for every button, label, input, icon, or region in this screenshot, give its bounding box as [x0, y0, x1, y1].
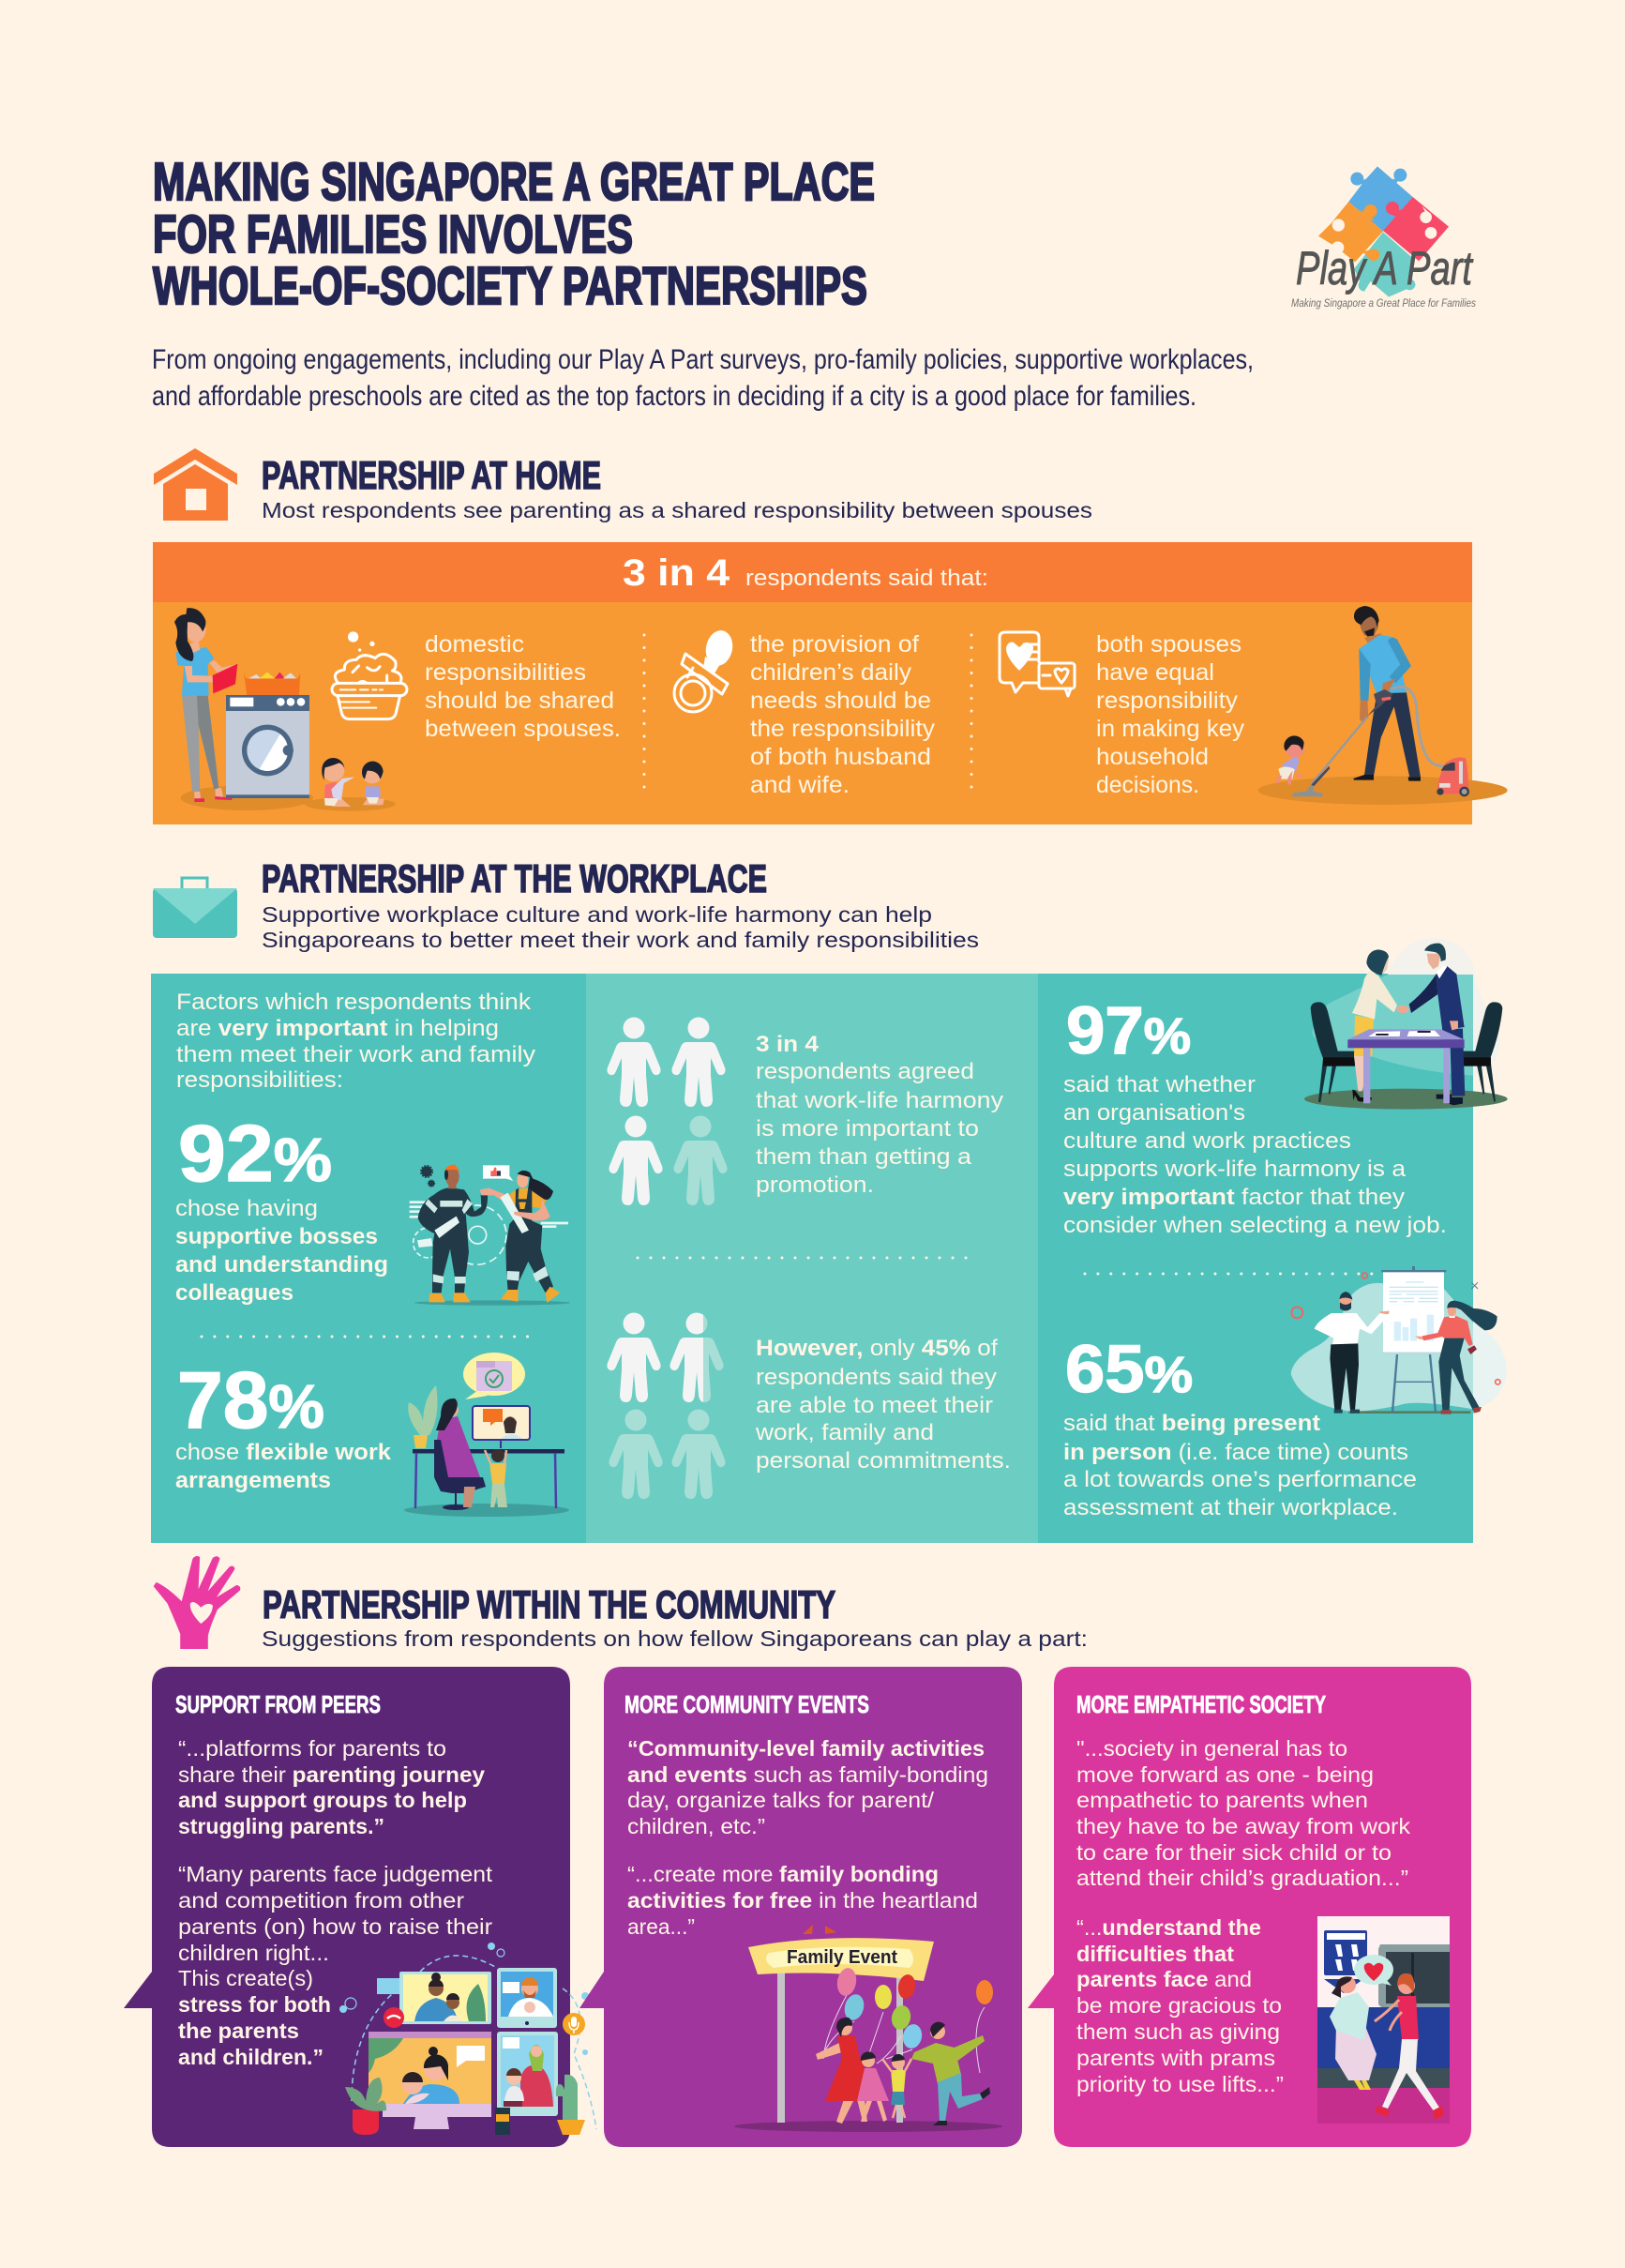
- quote: family bonding for free: [627, 1862, 978, 1939]
- text: domestic responsibilities: responsibilities: [425, 659, 586, 686]
- quote: understand the difficulties: parents face and: [1076, 1967, 1252, 1991]
- icon: briefcase: [153, 878, 237, 938]
- text: household decisions: household: [1096, 744, 1209, 770]
- quote: judgement and competition: and competition from other: [178, 1888, 464, 1913]
- text: face time: a lot towards one’s performance: [1063, 1467, 1417, 1492]
- text: factors intro: them meet their work and family: [176, 1042, 536, 1067]
- text: only 45%: respondents said they: [756, 1365, 998, 1390]
- logo wordmark: Play A Part: [1296, 242, 1474, 295]
- intro text: From ongoing engagements, including our Play A Part surveys, pro-family policies, supportive workplaces,: [152, 344, 1254, 375]
- quote: empathetic to parents: [1076, 1736, 1410, 1890]
- quote: parenting journey: “...platforms for parents to: [178, 1736, 446, 1761]
- quote: empathetic to parents: "...society in general has to: [1076, 1736, 1347, 1761]
- text: children's daily needs: children’s daily: [750, 659, 912, 686]
- icon: puzzle pieces: [1318, 166, 1449, 297]
- heading: partnership within the community: Suggestions from respondents on how fellow Singaporeans can play a part:: [262, 1626, 1088, 1651]
- quote: judgement and competition: children right...: [178, 1941, 329, 1965]
- text: organisation culture: consider when selecting a new job.: [1063, 1213, 1447, 1238]
- text: supportive bosses: chose having: [175, 1196, 318, 1221]
- text: domestic responsibilities: domestic: [425, 631, 524, 658]
- illustration: parent working from home: [404, 1353, 569, 1517]
- illustration: mother at washing machine with children: [174, 608, 396, 811]
- text: only 45%: However, only 45% of: [756, 1336, 998, 1361]
- text: children's daily needs: the responsibility: [750, 716, 936, 742]
- panel: workplace right column: [1038, 938, 1508, 1543]
- heading: partnership at the workplace: [262, 856, 979, 952]
- quote: understand the difficulties: parents with prams: [1076, 2046, 1275, 2070]
- text: household decisions: in making key: [1096, 716, 1245, 742]
- quote: empathetic to parents: move forward as one - being: [1076, 1762, 1374, 1787]
- banner: 3 in 4 respondents: [153, 542, 1472, 602]
- text: household decisions: decisions.: [1096, 772, 1199, 798]
- title: WHOLE-OF-SOCIETY PARTNERSHIPS: [153, 256, 867, 316]
- text: household decisions: both spouses: [1096, 631, 1241, 658]
- text: only 45%: [755, 1336, 1011, 1474]
- intro text: and affordable preschools are cited as the top factors in deciding if a city is a good place for families.: [152, 381, 1196, 412]
- card heading: MORE EMPATHETIC SOCIETY: [1076, 1690, 1326, 1718]
- heading: partnership at home: Most respondents see parenting as a shared responsibility between spouses: [262, 498, 1092, 522]
- quote: empathetic to parents: attend their child’s graduation...”: [1076, 1866, 1408, 1890]
- text: household decisions: responsibility: [1096, 688, 1239, 714]
- heading: partnership at home: [262, 453, 1092, 522]
- quote: empathetic to parents: empathetic to parents when: [1076, 1788, 1368, 1812]
- panel: workplace middle column: [586, 974, 1038, 1543]
- panel: workplace left column: [151, 974, 586, 1543]
- text: face time: in person (i.e. face time) counts: [1063, 1440, 1408, 1465]
- quote: parenting journey: [178, 1736, 485, 1838]
- heading: partnership at the workplace: Singaporeans to better meet their work and family responsibilities: [262, 928, 979, 952]
- quote: community-level activities: [627, 1736, 988, 1838]
- card heading: MORE COMMUNITY EVENTS: [624, 1690, 869, 1718]
- card heading: SUPPORT FROM PEERS: [175, 1690, 381, 1718]
- text: 3 in 4 work-life harmony: that work-life harmony: [756, 1088, 1004, 1113]
- text: children's daily needs: [750, 631, 936, 798]
- panel: home: [153, 542, 1508, 824]
- banner: 3 in 4 respondents: 3 in 4: [623, 552, 730, 594]
- quote: understand the difficulties: them such as giving: [1076, 2019, 1280, 2044]
- text: organisation culture: supports work-life harmony is a: [1063, 1157, 1406, 1182]
- quote: judgement and competition: stress for both: [178, 1992, 331, 2017]
- quote: empathetic to parents: to care for their sick child or to: [1076, 1840, 1392, 1865]
- stat: 65%: 65%: [1065, 1333, 1193, 1407]
- title: [153, 152, 875, 316]
- text: flexible work: [175, 1440, 391, 1493]
- text: factors intro: responsibilities:: [176, 1067, 343, 1093]
- stat: 78%: 78%: [177, 1356, 324, 1445]
- text: domestic responsibilities: should be shared: [425, 688, 614, 714]
- quote: judgement and competition: the parents: [178, 2019, 299, 2043]
- speech bubble: heart: [1354, 1955, 1393, 1986]
- text: organisation culture: very important factor that they: [1063, 1185, 1406, 1210]
- text: 3 in 4 work-life harmony: 3 in 4: [756, 1032, 819, 1057]
- illustration: family event sign and family: [734, 1925, 1002, 2132]
- heading: partnership within the community: PARTNERSHIP WITHIN THE COMMUNITY: [263, 1582, 835, 1626]
- quote: parenting journey: and support groups to help: [178, 1788, 467, 1812]
- logo: Play A Part: [1291, 166, 1476, 310]
- illustration: father vacuuming with baby: [1258, 606, 1508, 805]
- quote: family bonding for free: “...create more family bonding: [627, 1862, 939, 1886]
- text: supportive bosses: and understanding: [175, 1252, 388, 1278]
- stat: 97%: 97%: [1066, 994, 1191, 1068]
- text: face time: said that being present: [1063, 1411, 1320, 1436]
- stat: 92%: 92%: [178, 1110, 332, 1199]
- man in green shirt: [911, 2043, 961, 2084]
- quote: understand the difficulties: [1076, 1915, 1284, 2096]
- quote: understand the difficulties: priority to use lifts...”: [1076, 2072, 1284, 2096]
- text: organisation culture: [1063, 1072, 1447, 1238]
- quote: community-level activities: children, etc.”: [627, 1814, 765, 1838]
- text: children's daily needs: needs should be: [750, 688, 931, 714]
- text: organisation culture: culture and work practices: [1063, 1128, 1351, 1154]
- baby: [1282, 756, 1300, 772]
- text: 3 in 4 work-life harmony: them than getting a: [756, 1144, 971, 1170]
- text: household decisions: [1096, 631, 1245, 798]
- text: factors intro: [176, 990, 536, 1093]
- text: only 45%: are able to meet their: [756, 1393, 993, 1418]
- illustration: family video call: [339, 1943, 596, 2135]
- text: 3 in 4 work-life harmony: respondents agreed: [756, 1059, 974, 1084]
- quote: judgement and competition: parents (on) how to raise their: [178, 1914, 492, 1939]
- text: domestic responsibilities: [425, 631, 621, 742]
- icon group: 45% people: [607, 1313, 726, 1499]
- woman in red dress: [816, 2043, 867, 2124]
- text: domestic responsibilities: between spouses.: [425, 716, 621, 742]
- quote: understand the difficulties: be more gracious to: [1076, 1993, 1282, 2018]
- quote: empathetic to parents: they have to be away from work: [1076, 1814, 1410, 1838]
- icon: house: [154, 448, 237, 521]
- text: 3 in 4 work-life harmony: is more important to: [756, 1116, 979, 1142]
- quote: judgement and competition: “Many parents face judgement: [178, 1862, 492, 1886]
- text: supportive bosses: supportive bosses: [175, 1224, 378, 1249]
- icon group: 3 in 4 people: [607, 1017, 728, 1205]
- text: children's daily needs: and wife.: [750, 772, 850, 798]
- sign: Family Event: [787, 1947, 897, 1968]
- quote: family bonding for free: area...”: [627, 1914, 695, 1939]
- text: 3 in 4 work-life harmony: promotion.: [756, 1172, 874, 1198]
- text: household decisions: have equal: [1096, 659, 1214, 686]
- icon: pacifier: [674, 628, 736, 712]
- heading: partnership at the workplace: Supportive workplace culture and work-life harmony can help: [262, 902, 932, 927]
- text: flexible work: arrangements: [175, 1468, 331, 1493]
- heading: partnership at home: PARTNERSHIP AT HOME: [262, 453, 601, 497]
- logo tagline: Making Singapore a Great Place for Families: [1291, 298, 1476, 310]
- quote: community-level activities: “Community-level family activities: [627, 1736, 985, 1761]
- quote: community-level activities: and events such as family-bonding: [627, 1762, 988, 1787]
- panel: support from peers: [124, 1667, 596, 2147]
- heading: partnership at the workplace: PARTNERSHIP AT THE WORKPLACE: [262, 856, 767, 900]
- quote: judgement and competition: and children.”: [178, 2045, 323, 2069]
- heading: partnership within the community: [262, 1582, 1088, 1651]
- title: MAKING SINGAPORE A GREAT PLACE: [153, 152, 875, 212]
- illustration: presentation: [1291, 1266, 1507, 1414]
- sign: [748, 1938, 934, 1981]
- icon: laundry basket: [332, 631, 407, 719]
- text: organisation culture: an organisation's: [1063, 1100, 1245, 1126]
- title: FOR FAMILIES INVOLVES: [153, 204, 633, 265]
- quote: family bonding for free: activities for free in the heartland: [627, 1888, 978, 1913]
- text: flexible work: chose flexible work: [175, 1440, 391, 1465]
- quote: parenting journey: share their parenting journey: [178, 1762, 485, 1787]
- illustration: gracious lift scene: [1317, 1916, 1450, 2124]
- panel: more community events: [579, 1667, 1022, 2147]
- text: face time: [1063, 1411, 1417, 1520]
- quote: judgement and competition: This create(s): [178, 1966, 313, 1990]
- intro text: [152, 344, 1254, 412]
- quote: parenting journey: struggling parents.”: [178, 1814, 384, 1838]
- panel: more empathetic society: [1028, 1667, 1471, 2147]
- text: only 45%: personal commitments.: [756, 1448, 1011, 1474]
- icon: chat bubbles with hearts: [1000, 632, 1075, 696]
- text: factors intro: are very important in helping: [176, 1016, 499, 1041]
- children: [325, 783, 384, 807]
- illustration: two engineers: [410, 1165, 570, 1306]
- text: supportive bosses: colleagues: [175, 1280, 293, 1306]
- icon: pink hand with heart: [154, 1556, 240, 1649]
- text: only 45%: work, family and: [755, 1420, 934, 1445]
- quote: understand the difficulties: “...understand the: [1076, 1915, 1261, 1940]
- text: children's daily needs: of both husband: [750, 744, 931, 770]
- text: organisation culture: said that whether: [1063, 1072, 1256, 1097]
- text: supportive bosses: [175, 1196, 388, 1306]
- text: face time: assessment at their workplace.: [1063, 1495, 1398, 1520]
- text: factors intro: Factors which respondents think: [176, 990, 532, 1015]
- banner: 3 in 4 respondents: respondents said that:: [745, 566, 988, 591]
- quote: community-level activities: day, organize talks for parent/: [627, 1788, 934, 1812]
- quote: understand the difficulties: difficulties that: [1076, 1942, 1234, 1966]
- text: 3 in 4 work-life harmony: [756, 1032, 1004, 1198]
- illustration: handshake at table: [1304, 938, 1508, 1110]
- quote: judgement and competition: [178, 1862, 492, 2069]
- text: children's daily needs: the provision of: [750, 631, 919, 658]
- children: [857, 2068, 889, 2101]
